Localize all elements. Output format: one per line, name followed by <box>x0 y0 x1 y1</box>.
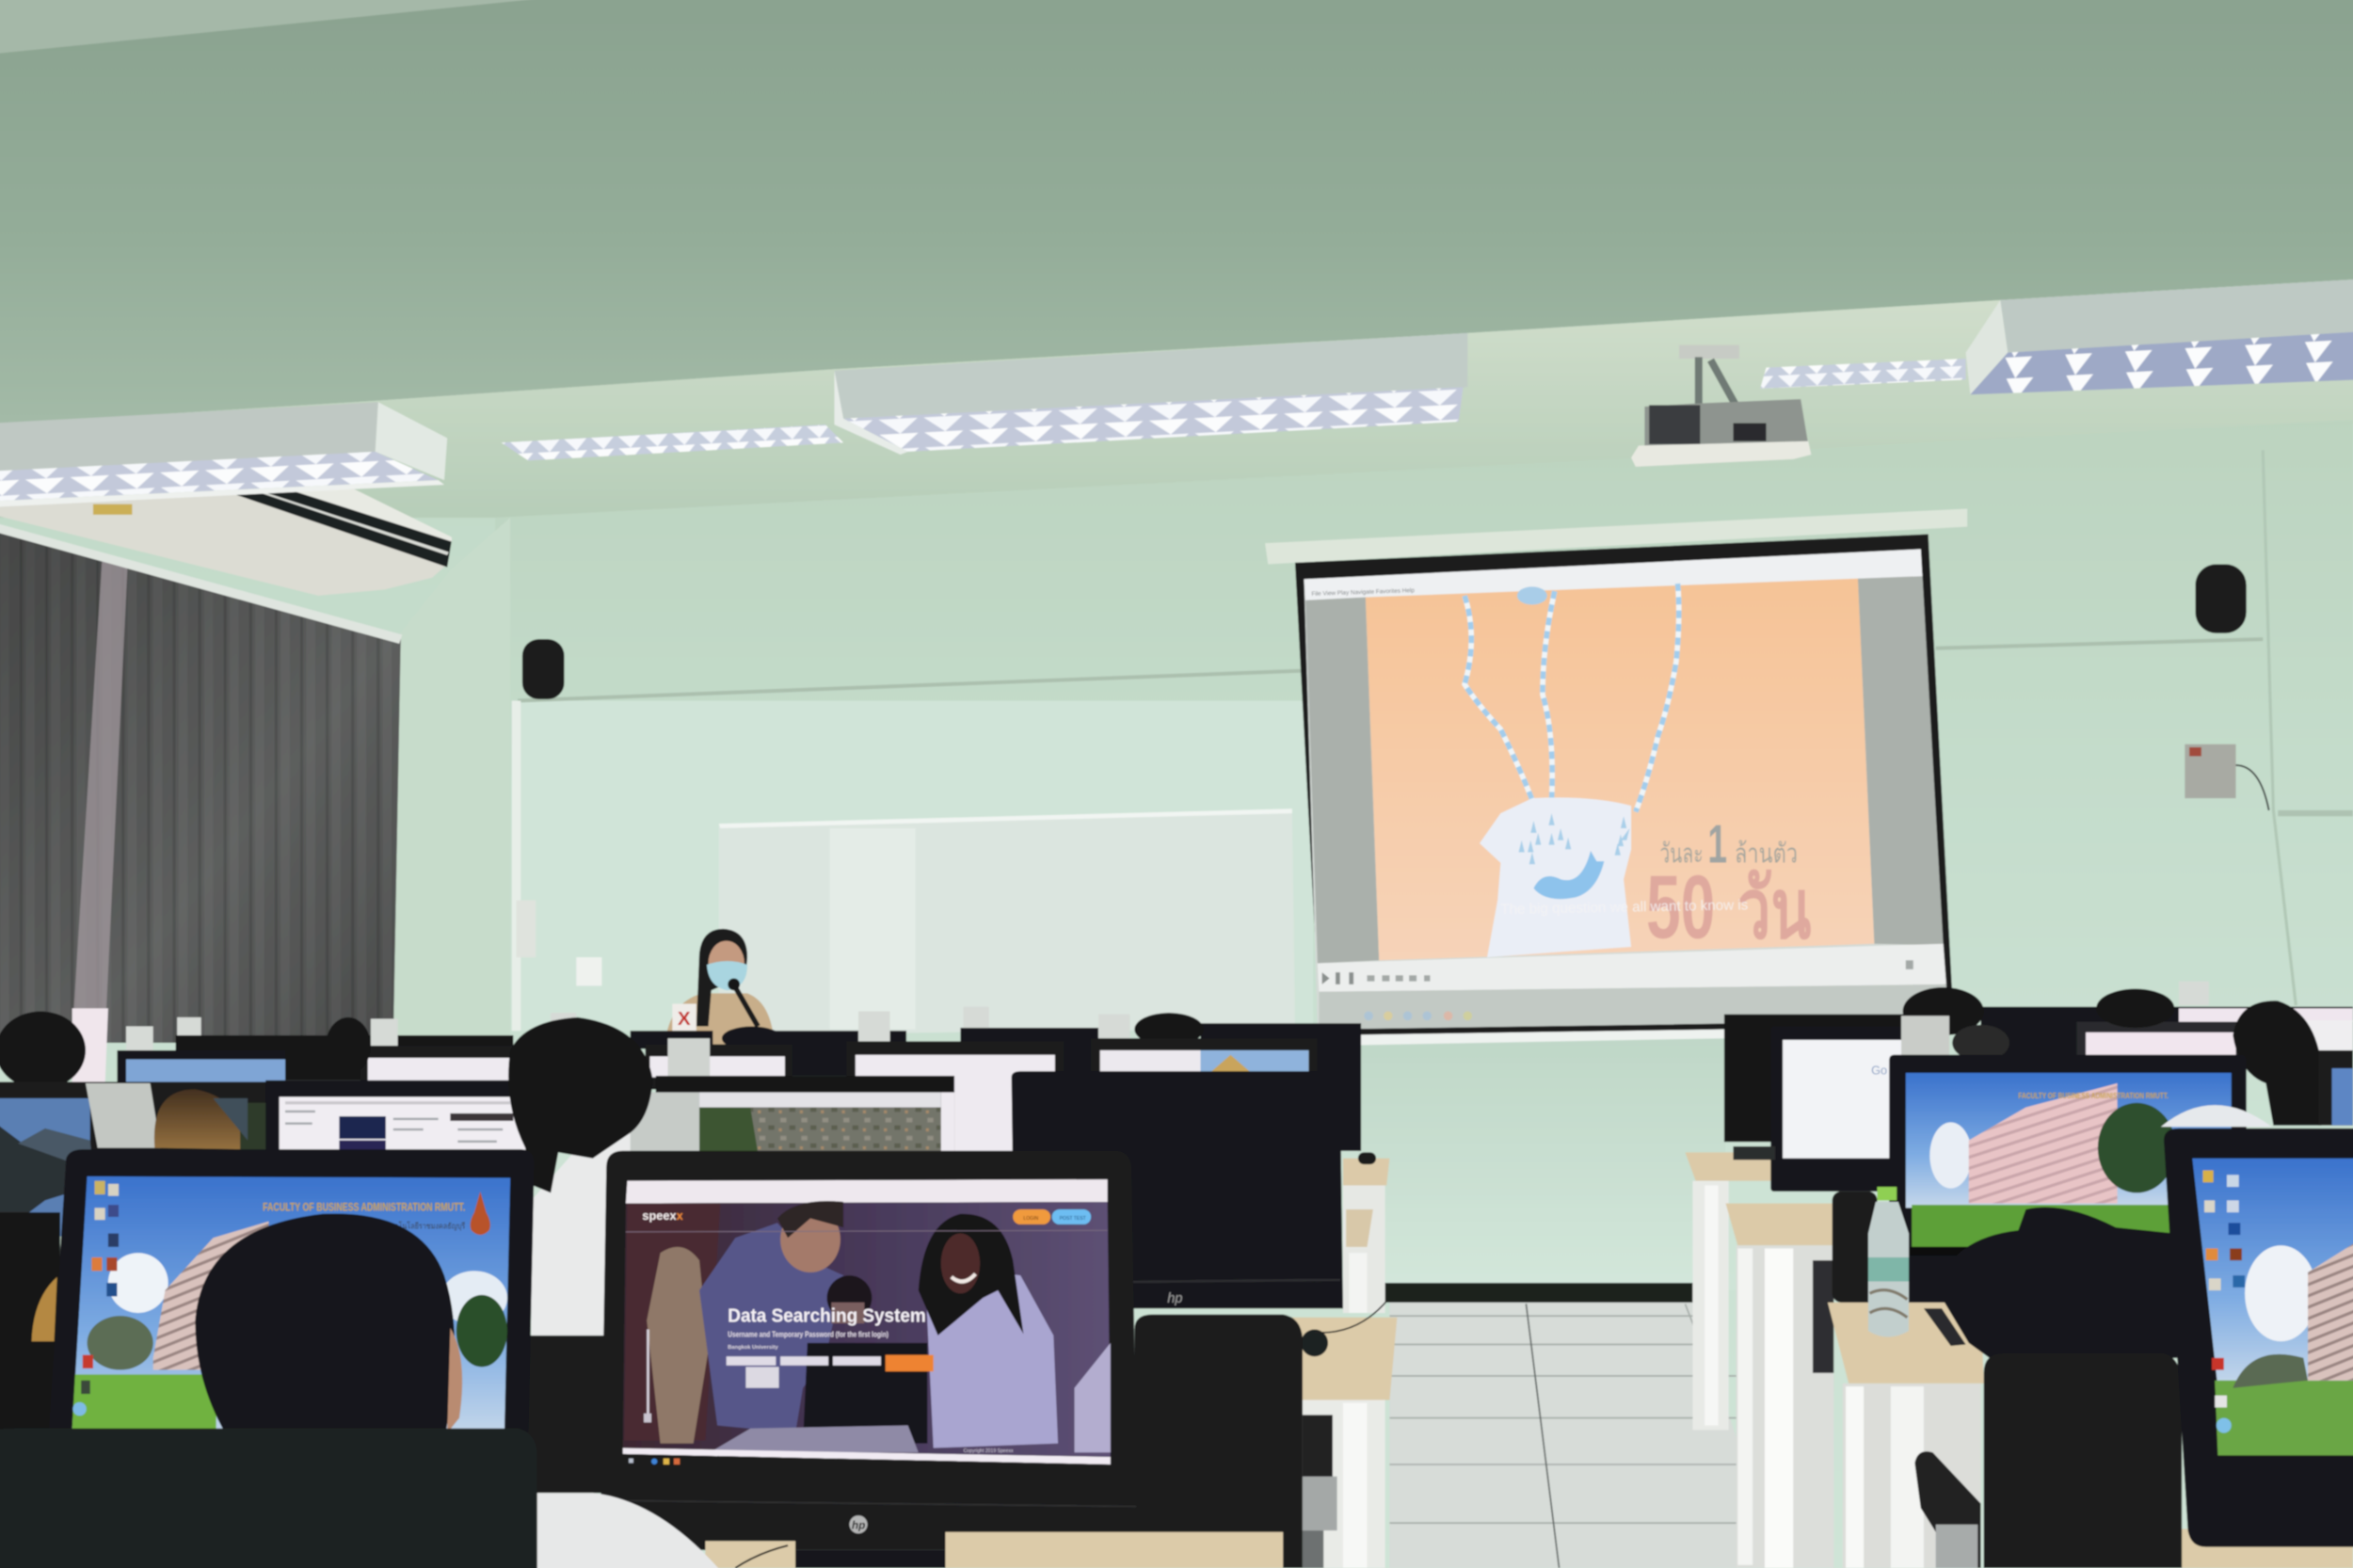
headline: Data Searching System <box>728 1305 926 1327</box>
seated students: background heads <box>0 987 2174 1089</box>
back wall panels <box>393 420 2353 1290</box>
drops <box>1518 813 1629 864</box>
whale <box>1533 851 1604 899</box>
form fields <box>727 1356 776 1366</box>
water streams <box>1465 584 1679 811</box>
side grey <box>1305 598 1379 964</box>
third row: back of monitor <box>1012 1071 1343 1308</box>
speaker right <box>2196 564 2247 633</box>
chair behind bottle <box>1833 1192 1878 1303</box>
front monitor: left with faculty wallpaper: FACULTY OF BUSINESS ADMINISTRATION RMUTT. <box>263 1201 465 1214</box>
front monitor: centre speexx <box>600 1151 1138 1568</box>
right desks <box>1685 1152 2353 1568</box>
screen casing <box>1265 508 1967 564</box>
front student shoulder <box>537 1493 725 1568</box>
side timeline <box>647 1330 649 1416</box>
student bent over at right <box>1937 1208 2177 1363</box>
wall switches <box>517 901 601 985</box>
whiteboard <box>719 808 1295 1035</box>
second row monitors <box>117 1008 2353 1161</box>
right monitor row 1 <box>1733 1016 2009 1192</box>
subtitle: The big question we all want to know is <box>1500 897 1749 918</box>
hp logo <box>849 1515 868 1533</box>
third row: map monitor <box>626 1076 954 1159</box>
ceiling light: centre <box>835 333 1467 455</box>
projection screen: 1 <box>1707 815 1727 875</box>
ceiling soffit <box>0 280 2353 518</box>
moon drop <box>1517 586 1547 604</box>
speaker left <box>522 639 565 699</box>
login buttons <box>1013 1209 1050 1224</box>
speexx hero image <box>623 1202 1111 1457</box>
chair backs behind centre <box>528 1315 1337 1568</box>
stand <box>788 1550 945 1568</box>
media player controls <box>1318 944 1946 992</box>
floor <box>1358 1283 1778 1568</box>
right monitor row 2 with building wallpaper <box>1889 1050 2353 1303</box>
left student with blonde hair <box>0 1212 60 1430</box>
taskbar <box>623 1454 1111 1477</box>
projection screen: ล้านตัว <box>1735 840 1798 870</box>
front monitor: left with faculty wallpaper: เทคโนโลยีราชมงคลธัญบุรี <box>387 1222 466 1232</box>
ceiling light: left <box>0 402 447 507</box>
page bottom bar <box>623 1448 1111 1464</box>
third row: left monitor with mountain wallpaper <box>0 1081 278 1237</box>
water bottle <box>1868 1187 1909 1336</box>
screen surface <box>1305 549 1946 1030</box>
front monitor: centre speexx: POST TEST <box>1060 1216 1086 1222</box>
logo: speexx <box>642 1208 683 1223</box>
projection screen <box>1265 508 1967 1040</box>
back row monitors <box>126 982 2353 1151</box>
front monitor: left with faculty wallpaper <box>48 1149 535 1440</box>
student white shirt <box>508 1017 653 1336</box>
projection screen: 50 <box>1646 856 1715 957</box>
privacy dividers <box>126 982 2209 1050</box>
presenter <box>664 929 775 1045</box>
wall control box <box>2185 744 2269 810</box>
keyboard <box>1924 1308 1966 1346</box>
front monitor: centre speexx: Username and Temporary Password (for the first login) <box>728 1330 888 1338</box>
projector <box>1631 345 1811 467</box>
back heads <box>722 1026 782 1050</box>
right front monitor <box>2164 1128 2353 1547</box>
front student head <box>195 1213 462 1433</box>
window title bar <box>1305 549 1922 600</box>
orange video frame <box>1366 576 1874 960</box>
front monitor: centre speexx: Bangkok University <box>728 1345 779 1351</box>
front monitor: centre speexx: LOGIN <box>1023 1216 1039 1222</box>
Thai caption: วันละ <box>1659 840 1704 870</box>
curtain <box>0 522 402 1083</box>
right monitor row 1: Go <box>1871 1063 1887 1077</box>
screen frame <box>1295 535 1954 1040</box>
air conditioner <box>0 489 452 596</box>
browser bar <box>626 1179 1108 1204</box>
ceiling light: right small <box>1760 359 1966 389</box>
projection screen: วัน <box>1737 861 1811 955</box>
front desk strip <box>705 1532 1283 1568</box>
presenter: X <box>678 1008 691 1030</box>
third row: browser monitor <box>265 1080 536 1171</box>
right chair <box>1914 1353 2182 1568</box>
taskbar <box>1319 984 1947 1030</box>
left desks <box>1285 1152 1397 1568</box>
projection screen: File View Play Navigate Favorites Help <box>1311 587 1415 598</box>
iceberg <box>1480 797 1631 957</box>
third row: back of monitor: hp <box>1167 1291 1182 1306</box>
right monitor row 2 with building wallpaper: FACULTY OF BUSINESS ADMINISTRATION RMUTT. <box>2018 1092 2169 1100</box>
roller bottom bar <box>1321 1030 1725 1046</box>
front monitor: centre speexx: hp <box>852 1519 865 1532</box>
ceiling light: centre small left <box>502 424 843 460</box>
right student with ponytail <box>2233 1000 2323 1126</box>
ceiling light: right <box>1966 280 2353 394</box>
people in photo <box>624 1201 1111 1452</box>
front monitor: centre speexx: Copyright 2019 Speexx <box>964 1448 1014 1454</box>
ceiling beam face <box>0 0 2353 424</box>
front chair back <box>0 1429 537 1568</box>
